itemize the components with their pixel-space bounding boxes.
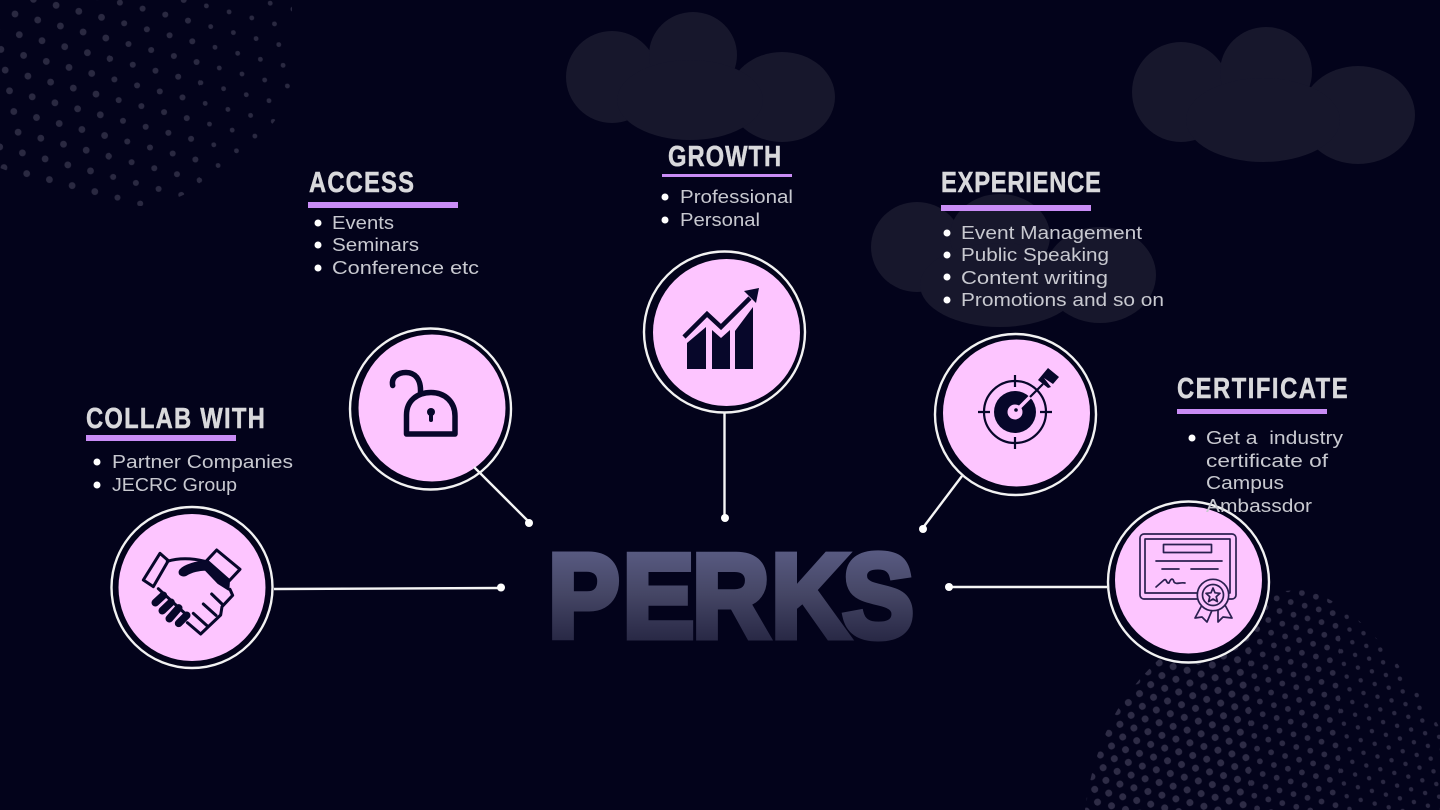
list: access: Seminars	[332, 235, 419, 255]
cloud: behind experience	[871, 194, 1156, 327]
icon: certificate with seal	[1140, 534, 1236, 622]
list: experience: Event Management	[961, 223, 1142, 243]
list: access	[314, 213, 479, 278]
cloud: top right	[1132, 27, 1415, 164]
panel: experience	[935, 166, 1164, 495]
circle: growth	[644, 252, 805, 412]
title: PERKS: PERKS	[548, 530, 914, 662]
heading underline	[308, 202, 458, 208]
connector: collab	[274, 584, 505, 592]
heading: experience: EXPERIENCE	[941, 166, 1101, 199]
heading underline	[86, 435, 236, 441]
list: experience: Public Speaking	[961, 245, 1109, 265]
connector: certificate	[945, 583, 1107, 591]
heading: collab with: COLLAB WITH	[86, 402, 265, 435]
list: growth: Professional	[680, 187, 793, 207]
heading underline	[1177, 409, 1327, 414]
connector: access	[474, 467, 533, 527]
list: collab with: JECRC Group	[112, 475, 237, 495]
list: certificate: Campus	[1206, 473, 1284, 493]
connector: growth	[721, 413, 729, 522]
circle: collab	[112, 507, 272, 668]
list: certificate: Ambassdor	[1206, 496, 1312, 516]
list: experience	[944, 223, 1164, 310]
list: access: Events	[332, 213, 394, 233]
cloud: top center	[566, 12, 835, 142]
list: collab with	[94, 452, 293, 495]
dot pattern: bottom right	[1080, 580, 1440, 810]
heading underline	[662, 174, 792, 177]
list: collab with: Partner Companies	[112, 452, 293, 472]
heading: certificate: CERTIFICATE	[1177, 372, 1348, 405]
icon: open padlock	[392, 372, 455, 434]
list: experience: Promotions and so on	[961, 290, 1164, 310]
list: certificate: Get a industry	[1206, 428, 1343, 448]
heading: access: ACCESS	[309, 166, 414, 199]
list: certificate: certificate of	[1206, 451, 1329, 471]
heading underline	[941, 205, 1091, 211]
list: growth	[662, 187, 793, 230]
connector: experience	[919, 476, 962, 533]
panel: certificate	[1108, 372, 1348, 662]
panel: access	[308, 166, 511, 490]
list: growth: Personal	[680, 210, 760, 230]
dot pattern: top left	[0, 0, 295, 210]
icon: target with arrow	[978, 368, 1059, 449]
heading: growth: GROWTH	[668, 140, 781, 173]
circle: access	[350, 328, 511, 490]
list: certificate	[1188, 428, 1343, 516]
icon: handshake	[143, 550, 240, 634]
icon: growth chart	[684, 288, 759, 369]
list: experience: Content writing	[961, 268, 1108, 288]
panel: collab with	[86, 402, 293, 668]
circle: experience	[935, 334, 1096, 495]
circle: certificate	[1108, 502, 1269, 662]
panel: growth	[644, 140, 805, 412]
list: access: Conference etc	[332, 258, 479, 278]
